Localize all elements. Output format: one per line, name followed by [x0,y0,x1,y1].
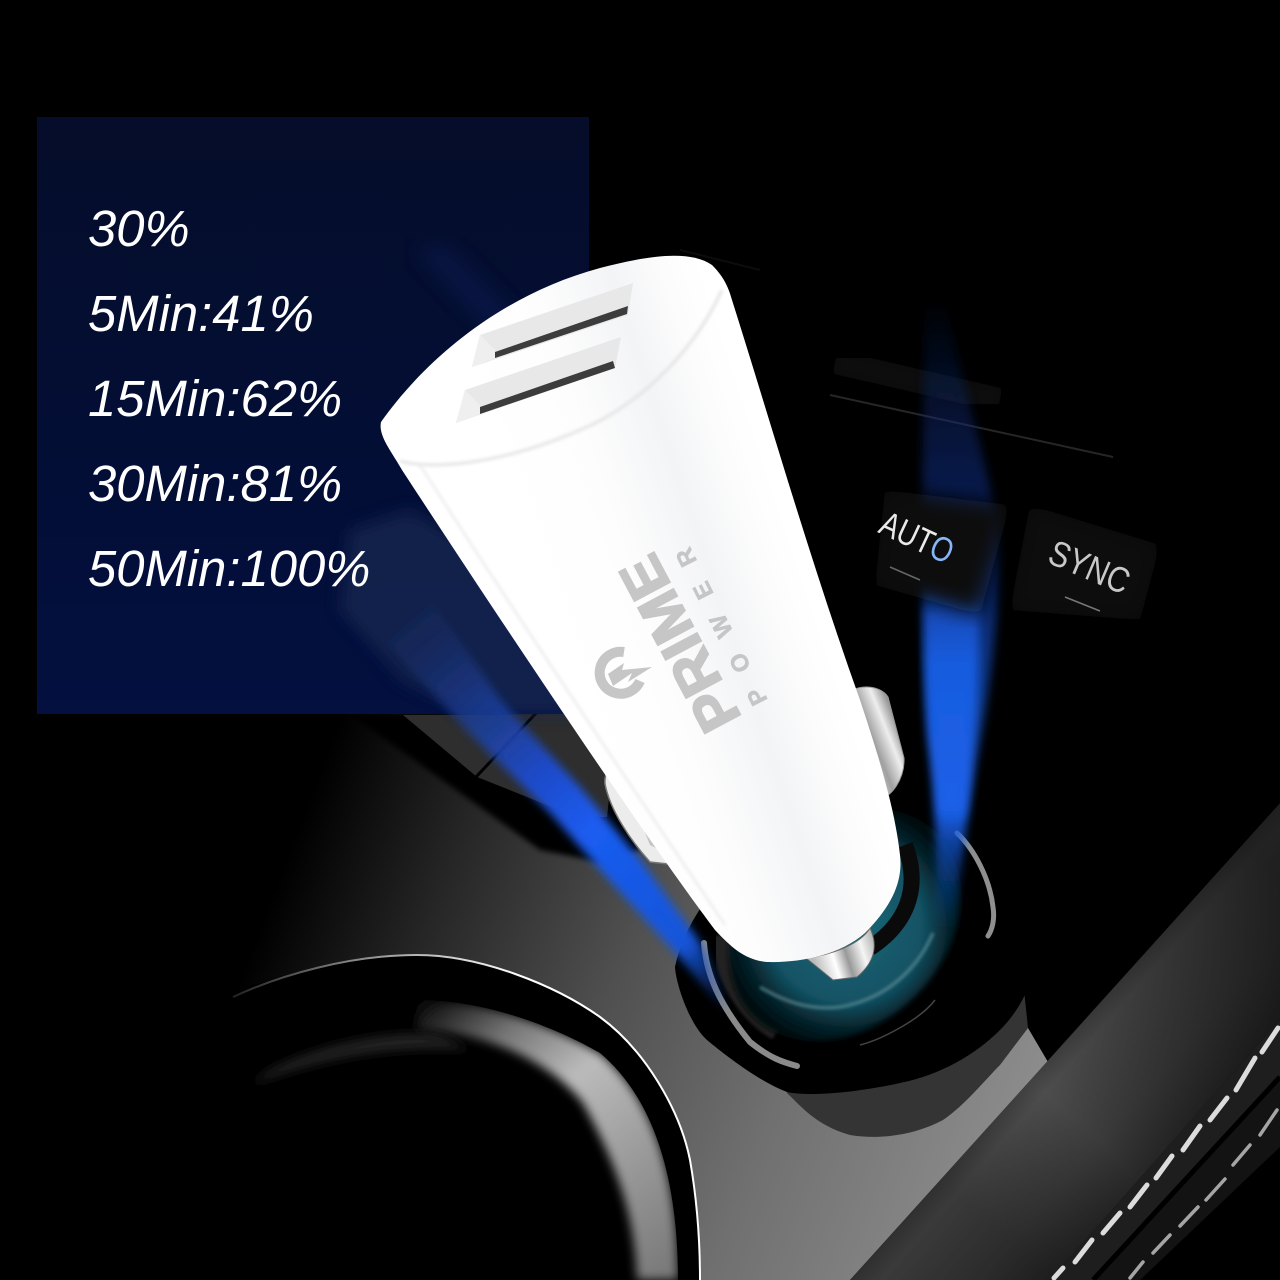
climate buttons [874,490,1160,620]
metal contact: right [846,687,904,798]
lever seen through panel [340,510,590,714]
statistics text block: 50Min:100% [88,540,370,597]
button: SYNC: SYNC [1043,532,1136,602]
stitching [1054,1028,1278,1278]
statistics text block: 30% [88,200,190,257]
cup holder black gap [230,955,700,1280]
usb port: lower [456,337,621,423]
button: AUTO: AUTO [874,504,960,572]
blue light streak, left [387,603,732,1017]
charger body [381,256,901,962]
dashboard lines [680,250,1113,457]
cigarette lighter socket [675,762,1040,1094]
button: SYNC [1010,505,1160,620]
logo word: POWER: POWER [671,543,773,710]
car charger [381,256,904,980]
blue light streak, right: core [924,540,979,930]
metal contact: tip [806,928,874,980]
metal contact: left [605,767,672,864]
cup holder faint crescent [250,1034,470,1085]
body edge bevel [420,465,725,925]
button: AUTO [874,490,1010,615]
car console surface [230,714,1048,1280]
socket textured ring [722,935,778,1030]
lever end, dark wedge [490,570,590,714]
socket glow [682,762,1008,1088]
statistics text block: 30Min:81% [88,455,342,512]
logo word: PRIME: PRIME [607,544,753,742]
socket shadow blob [787,980,1028,1137]
blue light streak, right: halo [922,295,998,820]
usb port: upper [472,283,633,367]
steering wheel [850,800,1280,1280]
statistics text block: 15Min:62% [88,370,342,427]
gear lever [403,693,613,817]
top face shading [400,290,722,465]
gear lever shadow [350,714,640,862]
logo icon [600,652,652,694]
cup holder inner lit band [417,1000,678,1280]
statistics text block [88,200,370,597]
socket rim highlight lines [760,933,933,1008]
brand logo [600,543,773,742]
faint blue glow, upper left [415,245,520,330]
statistics text block: 5Min:41% [88,285,314,342]
cup holder [200,955,700,1280]
translucent navy panel [37,117,589,714]
cup holder rim [233,955,700,1280]
